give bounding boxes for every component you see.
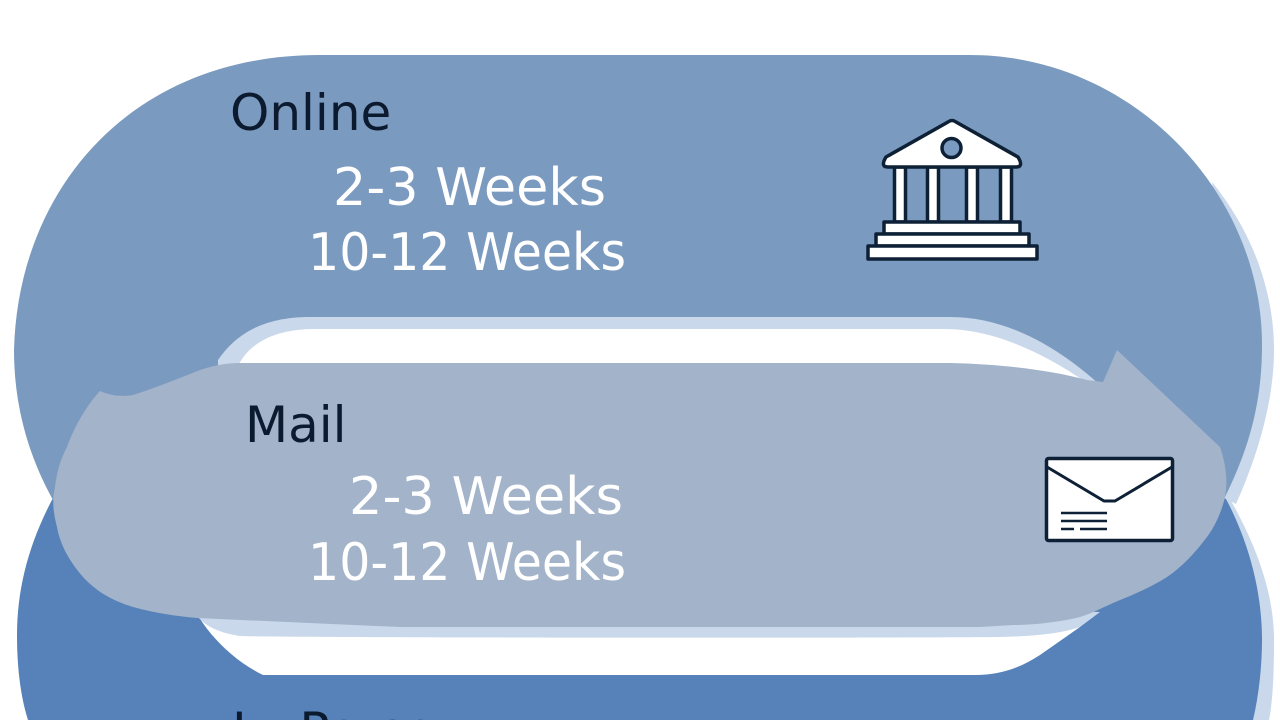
online heading: Online <box>230 84 391 142</box>
online panel pale edge <box>1212 182 1274 504</box>
top gap white cutout <box>238 329 1090 385</box>
mail time: first range: 2-3 Weeks <box>349 467 623 527</box>
bank roof medallion <box>942 138 961 158</box>
online time: first range: 2-3 Weeks <box>333 158 606 218</box>
bottom gap white cutout <box>199 600 1080 675</box>
icon: bank <box>868 120 1037 259</box>
in person panel fill <box>17 497 1262 720</box>
bank roof <box>883 120 1021 167</box>
bottom gap pale band <box>197 600 1100 638</box>
envelope flap <box>1047 467 1172 501</box>
panel: bottom gap <box>197 600 1100 675</box>
panel: online <box>14 55 1274 504</box>
online panel fill <box>14 55 1262 500</box>
envelope address lines <box>1061 513 1107 529</box>
in person panel pale edge <box>1225 490 1274 720</box>
mail heading: Mail <box>245 396 347 454</box>
online time: second range: 10-12 Weeks <box>308 223 626 283</box>
mail panel fill <box>53 350 1226 627</box>
mail time: second range: 10-12 Weeks <box>308 533 626 593</box>
envelope body <box>1046 458 1172 540</box>
bank steps <box>868 222 1037 259</box>
bank columns <box>894 167 1012 222</box>
panel: in person <box>17 490 1274 720</box>
icon: envelope <box>1046 458 1172 540</box>
top gap pale band <box>218 317 1100 385</box>
panel: mail <box>53 350 1226 627</box>
